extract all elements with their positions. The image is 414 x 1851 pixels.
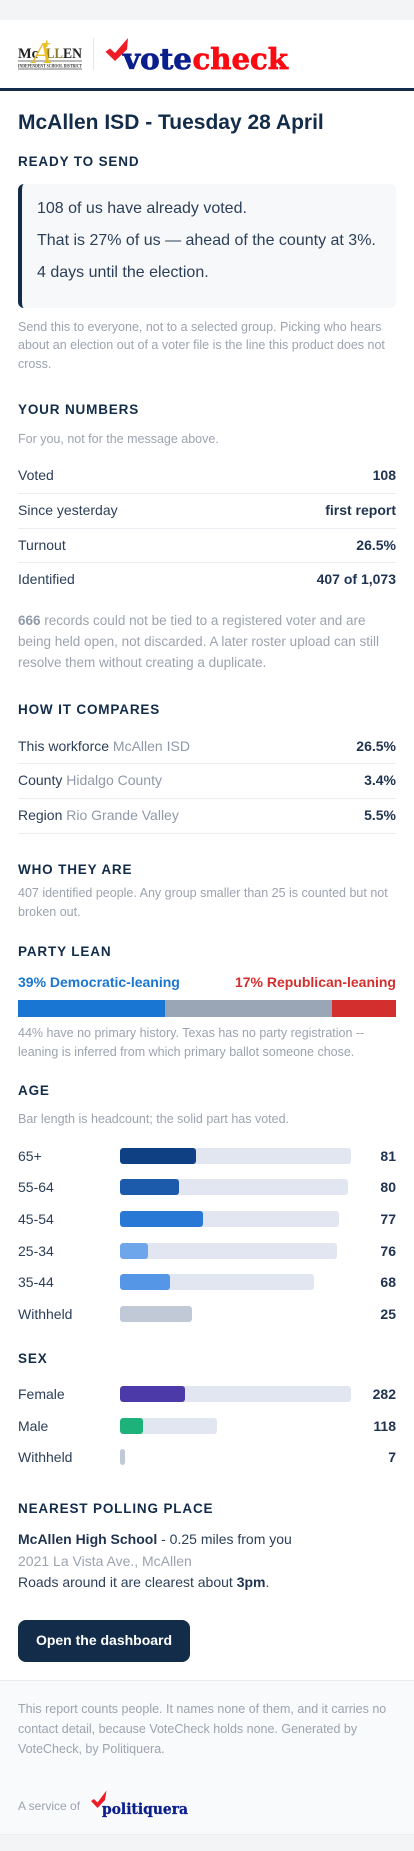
panel: party lean bbox=[18, 944, 396, 1058]
logo: votecheck bbox=[106, 38, 289, 76]
bar: male: 118 bbox=[373, 1418, 396, 1434]
bar: withheld: Withheld bbox=[18, 1449, 72, 1465]
bar: 35-44 bbox=[18, 1274, 396, 1290]
bar: 45-54 bbox=[18, 1211, 396, 1227]
bar: 45-54: 45-54 bbox=[18, 1211, 54, 1227]
bar: 55-64: 55-64 bbox=[18, 1179, 54, 1195]
row: region: 5.5% bbox=[364, 807, 396, 823]
note: send to everyone bbox=[18, 320, 385, 371]
bar: male bbox=[18, 1418, 396, 1434]
note: for you: For you, not for the message above. bbox=[18, 432, 219, 446]
callout message: That is 27% of us — ahead of the county at 3%. bbox=[37, 232, 376, 249]
heading: how it compares: HOW IT COMPARES bbox=[18, 702, 160, 717]
bar: 25-34: 25-34 bbox=[18, 1243, 54, 1259]
heading: ready to send: READY TO SEND bbox=[18, 154, 139, 169]
logo: politiquera bbox=[91, 1790, 188, 1818]
row: since yesterday bbox=[18, 502, 396, 518]
panel: age chart bbox=[18, 1083, 396, 1322]
panel: your numbers bbox=[18, 402, 396, 670]
row: this workforce bbox=[18, 738, 396, 754]
label: democratic share: 39% Democratic-leaning bbox=[18, 974, 180, 990]
best time: Roads around it are clearest about 3pm. bbox=[18, 1574, 269, 1590]
bar: 65+: 81 bbox=[380, 1148, 396, 1164]
panel: how it compares bbox=[18, 702, 396, 834]
bar: 35-44: 68 bbox=[380, 1274, 396, 1290]
title: McAllen ISD - Tuesday 28 April bbox=[18, 111, 324, 134]
note: bar length: Bar length is headcount; the solid part has voted. bbox=[18, 1112, 289, 1126]
heading: party lean: PARTY LEAN bbox=[18, 944, 111, 959]
logo: votecheck: check bbox=[192, 42, 289, 76]
note: identified people: 407 identified people. Any group smaller than 25 is counted but not bbox=[18, 886, 388, 900]
row: turnout: 26.5% bbox=[356, 537, 396, 553]
logo: McAllen ISD bbox=[18, 35, 82, 70]
row: voted: 108 bbox=[373, 467, 396, 483]
footer disclaimer: This report counts people. It names none of them, and it carries no bbox=[18, 1702, 386, 1716]
polling place name: McAllen High School - 0.25 miles from you bbox=[18, 1531, 292, 1547]
bar: withheld: 25 bbox=[380, 1306, 396, 1322]
logo: votecheck: vote bbox=[122, 42, 192, 76]
row: voted bbox=[18, 467, 396, 483]
heading: sex: SEX bbox=[18, 1351, 48, 1366]
row: identified: 407 of 1,073 bbox=[317, 571, 396, 587]
header logos bbox=[0, 20, 414, 91]
row: identified bbox=[18, 571, 396, 587]
row: since yesterday: first report bbox=[325, 502, 396, 518]
bar: 25-34: 76 bbox=[380, 1243, 396, 1259]
footer disclaimer bbox=[18, 1702, 386, 1756]
note: unmatched records bbox=[18, 612, 379, 670]
label: republican share: 17% Republican-leaning bbox=[235, 974, 396, 990]
bar: male: Male bbox=[18, 1418, 48, 1434]
note: send to everyone: cross. bbox=[18, 357, 51, 371]
heading: your numbers: YOUR NUMBERS bbox=[18, 402, 139, 417]
footer bbox=[0, 1680, 414, 1835]
panel: sex chart bbox=[18, 1351, 396, 1465]
callout message bbox=[18, 184, 396, 308]
panel: nearest polling place bbox=[18, 1501, 292, 1590]
bar: 65+ bbox=[18, 1148, 396, 1164]
callout message: 108 of us have already voted. bbox=[37, 200, 247, 217]
note: send to everyone: Send this to everyone, not to a selected group. Picking who hears bbox=[18, 320, 381, 334]
row: turnout bbox=[18, 537, 396, 553]
row: this workforce: This workforce McAllen ISD bbox=[18, 738, 190, 754]
bar: 35-44: 35-44 bbox=[18, 1274, 54, 1290]
note: primary history: 44% have no primary history. Texas has no party registration -- bbox=[18, 1026, 364, 1040]
row: since yesterday: Since yesterday bbox=[18, 502, 118, 518]
bar: 45-54: 77 bbox=[380, 1211, 396, 1227]
polling place address: 2021 La Vista Ave., McAllen bbox=[18, 1553, 192, 1569]
row: identified: Identified bbox=[18, 571, 75, 587]
panel: who they are bbox=[18, 862, 388, 918]
row: voted: Voted bbox=[18, 467, 54, 483]
logo: politiquera: politiquera bbox=[102, 1800, 188, 1818]
logo: McAllen ISD: LL bbox=[46, 46, 63, 62]
row: county bbox=[18, 772, 396, 788]
heading: who they are: WHO THEY ARE bbox=[18, 862, 132, 877]
note: primary history: leaning is inferred from which primary ballot someone chose. bbox=[18, 1044, 354, 1058]
button: open the dashboard bbox=[18, 1620, 190, 1662]
note: identified people: broken out. bbox=[18, 904, 81, 918]
bar: female: Female bbox=[18, 1386, 65, 1402]
bar: withheld: Withheld bbox=[18, 1306, 72, 1322]
row: county: 3.4% bbox=[364, 772, 396, 788]
row: county: County Hidalgo County bbox=[18, 772, 162, 788]
bar: 25-34 bbox=[18, 1243, 396, 1259]
note: unmatched records: resolve them without creating a duplicate. bbox=[18, 654, 266, 670]
bar: withheld: 7 bbox=[388, 1449, 396, 1465]
logo: McAllen ISD: EN bbox=[63, 46, 82, 62]
note: primary history bbox=[18, 1026, 364, 1058]
service line: A service of bbox=[18, 1799, 80, 1813]
footer disclaimer: VoteCheck, by Politiquera. bbox=[18, 1742, 165, 1756]
stacked bar: party lean bbox=[18, 1000, 396, 1017]
row: turnout: Turnout bbox=[18, 537, 66, 553]
note: identified people bbox=[18, 886, 388, 918]
bar: 55-64 bbox=[18, 1179, 396, 1195]
logo: McAllen ISD: INDEPENDENT SCHOOL DISTRICT bbox=[18, 64, 82, 70]
panel: ready to send bbox=[18, 154, 385, 371]
bar: 65+: 65+ bbox=[18, 1148, 42, 1164]
bar: female: 282 bbox=[373, 1386, 396, 1402]
logo: McAllen ISD: + bbox=[43, 36, 51, 51]
callout message: 4 days until the election. bbox=[37, 264, 209, 281]
logo: McAllen ISD: Mc bbox=[18, 46, 38, 62]
note: send to everyone: about an election out of a voter file is the line this product does not bbox=[18, 338, 385, 352]
row: region bbox=[18, 807, 396, 823]
button: open the dashboard: Open the dashboard bbox=[36, 1632, 172, 1648]
row: region: Region Rio Grande Valley bbox=[18, 807, 179, 823]
note: unmatched records: 666 records could not be tied to a registered voter and are bbox=[18, 612, 365, 628]
bar: withheld bbox=[18, 1449, 396, 1465]
bar: 55-64: 80 bbox=[380, 1179, 396, 1195]
bar: withheld bbox=[18, 1306, 396, 1322]
logo: McAllen ISD: A bbox=[30, 35, 52, 70]
note: unmatched records: being held open, not discarded. A later roster upload can still bbox=[18, 634, 379, 648]
bar: female bbox=[18, 1386, 396, 1402]
heading: age: AGE bbox=[18, 1083, 50, 1098]
footer disclaimer: contact detail, because VoteCheck holds none. Generated by bbox=[18, 1722, 357, 1736]
heading: nearest polling place: NEAREST POLLING PLACE bbox=[18, 1501, 213, 1516]
row: this workforce: 26.5% bbox=[356, 738, 396, 754]
